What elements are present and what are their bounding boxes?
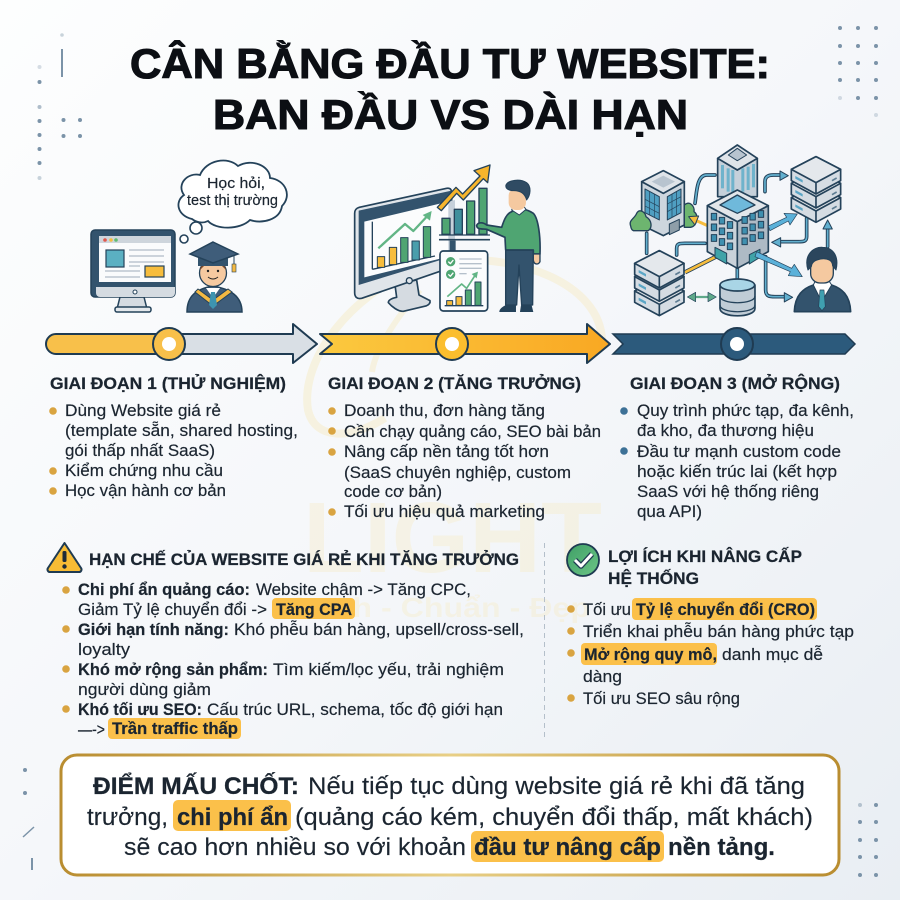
icon: thought bubble: Học hỏi, — [207, 175, 265, 192]
icon: growth chart and presenter — [355, 165, 540, 312]
stage 3 text: SaaS với hệ thống riêng — [637, 483, 819, 501]
monitor stand — [388, 280, 430, 311]
back tower — [718, 158, 757, 197]
icon: warning — [47, 543, 82, 572]
panel: limits of cheap website: Trần traffic thấp — [112, 720, 238, 738]
stage 3 text: qua API) — [637, 503, 702, 521]
stage 1 text: Học vận hành cơ bản — [65, 482, 226, 500]
server stack top right — [791, 185, 841, 222]
panel: limits of cheap website: Khó tối ưu SEO: — [78, 701, 202, 719]
stage 2 text: Nâng cấp nền tảng tốt hơn — [344, 443, 549, 461]
left building — [642, 182, 684, 236]
database — [720, 285, 755, 316]
timeline arrow: stage 3 — [613, 328, 855, 360]
green double arrow — [693, 293, 712, 300]
panel: limits of cheap website: Chi phí ẩn quảng cáo: — [78, 581, 250, 599]
stage 1 text: GIAI ĐOẠN 1 (THỬ NGHIỆM) — [50, 374, 286, 393]
stage 1 text: Dùng Website giá rẻ — [65, 402, 221, 420]
connectors — [647, 175, 828, 297]
callout: key takeaway: đầu tư nâng cấp — [474, 834, 661, 861]
businessman — [794, 285, 851, 312]
panel: limits of cheap website: HẠN CHẾ CỦA WEBSITE GIÁ RẺ KHI TĂNG TRƯỞNG — [89, 550, 519, 569]
yellow arrow — [437, 165, 490, 211]
trees — [630, 211, 651, 231]
callout: key takeaway: ĐIỂM MẤU CHỐT: — [93, 772, 299, 800]
stage 3 text: Đầu tư mạnh custom code — [637, 443, 841, 461]
icon: enterprise system diagram — [630, 145, 851, 316]
panel: limits of cheap website: —-> — [78, 721, 105, 739]
panel: upgrade benefits: Tối ưu — [583, 601, 631, 619]
panel: upgrade benefits: danh mục dễ — [722, 645, 823, 664]
callout: key takeaway: (quảng cáo kém, chuyển đổi thấp, mất khách) — [295, 804, 813, 831]
stage 3 text: GIAI ĐOẠN 3 (MỞ RỘNG) — [630, 374, 840, 393]
callout: key takeaway: nền tảng. — [668, 834, 775, 861]
stage 3 text: đa kho, đa thương hiệu — [637, 422, 814, 440]
stage 2 text: GIAI ĐOẠN 2 (TĂNG TRƯỞNG) — [328, 374, 581, 393]
title: BAN ĐẦU VS DÀI HẠN — [213, 91, 688, 138]
callout: key takeaway: Nếu tiếp tục dùng website giá rẻ khi đã tăng — [308, 773, 805, 800]
panel: upgrade benefits — [567, 547, 854, 708]
stage 1 text: gói thấp nhất SaaS) — [65, 442, 215, 460]
tilted monitor — [355, 188, 452, 299]
stage 2 text — [328, 374, 601, 521]
panel: upgrade benefits: HỆ THỐNG — [608, 568, 699, 588]
panel: upgrade benefits: Tỷ lệ chuyển đổi (CRO) — [636, 601, 815, 619]
clipboard — [440, 251, 488, 311]
title — [130, 39, 770, 138]
panel: limits of cheap website: Khó mở rộng sản phẩm: — [78, 661, 268, 679]
stage 2 text: Cần chạy quảng cáo, SEO bài bản — [344, 423, 601, 441]
stage 1 text: (template sẵn, shared hosting, — [65, 421, 298, 440]
stage 3 text — [620, 374, 854, 521]
panel: limits of cheap website: Website chậm -> Tăng CPC, — [256, 581, 471, 599]
panel: upgrade benefits: Tối ưu SEO sâu rộng — [583, 690, 740, 708]
panel: limits of cheap website: Giới hạn tính năng: — [78, 621, 229, 639]
panel: limits of cheap website: loyalty — [78, 641, 131, 659]
icon: check badge — [567, 544, 599, 576]
timeline arrow: stage 1 — [46, 324, 317, 363]
watermark logo — [272, 260, 602, 623]
watermark logo: Nhanh - Chuẩn - Đẹp — [272, 592, 590, 623]
stage 2 text: code cơ bản) — [344, 483, 442, 501]
panel: limits of cheap website: Tìm kiếm/lọc yếu, trải nghiệm — [273, 661, 504, 679]
blue arrows — [768, 213, 797, 231]
center building — [707, 206, 737, 268]
icon: thought bubble — [178, 160, 287, 243]
bars — [442, 188, 487, 234]
callout: key takeaway: chi phí ẩn — [177, 804, 288, 831]
stage 2 text: (SaaS chuyên nghiệp, custom — [344, 464, 571, 482]
callout: key takeaway: sẽ cao hơn nhiều so với khoản — [124, 834, 466, 861]
panel: upgrade benefits: Mở rộng quy mô, — [584, 646, 717, 664]
panel: limits of cheap website: Cấu trúc URL, schema, tốc độ giới hạn — [207, 701, 503, 719]
yellow arrows — [685, 254, 721, 272]
icon: thought bubble: test thị trường — [187, 192, 278, 209]
stage 1 text: Kiểm chứng nhu cầu — [65, 462, 223, 480]
panel: upgrade benefits: LỢI ÍCH KHI NÂNG CẤP — [608, 547, 802, 566]
stage 2 text: Doanh thu, đơn hàng tăng — [344, 402, 545, 420]
panel: limits of cheap website: Khó phễu bán hàng, upsell/cross-sell, — [234, 620, 524, 639]
timeline arrow: stage 2 — [320, 324, 610, 363]
icon: website monitor — [91, 230, 175, 312]
panel: upgrade benefits: Triển khai phễu bán hàng phức tạp — [583, 622, 854, 641]
watermark logo: LIGHT — [303, 482, 602, 594]
stage 2 text: Tối ưu hiệu quả marketing — [344, 503, 545, 521]
callout: key takeaway — [61, 755, 839, 875]
stage 3 text: Quy trình phức tạp, đa kênh, — [637, 402, 854, 420]
icon: graduate — [187, 242, 242, 312]
callout: key takeaway: trưởng, — [87, 804, 168, 831]
panel: limits of cheap website: người dùng giảm — [78, 681, 211, 699]
panel: limits of cheap website: Tăng CPA — [276, 601, 352, 619]
panel: limits of cheap website: Giảm Tỷ lệ chuyển đổi -> — [78, 601, 267, 619]
server stack bottom left — [635, 278, 684, 316]
panel: limits of cheap website — [62, 550, 524, 739]
person — [506, 250, 533, 305]
stage 1 text — [49, 374, 298, 500]
title: CÂN BẰNG ĐẦU TƯ WEBSITE: — [130, 39, 770, 87]
panel: upgrade benefits: dàng — [583, 668, 622, 686]
stage 3 text: hoặc kiến trúc lai (kết hợp — [637, 463, 837, 481]
